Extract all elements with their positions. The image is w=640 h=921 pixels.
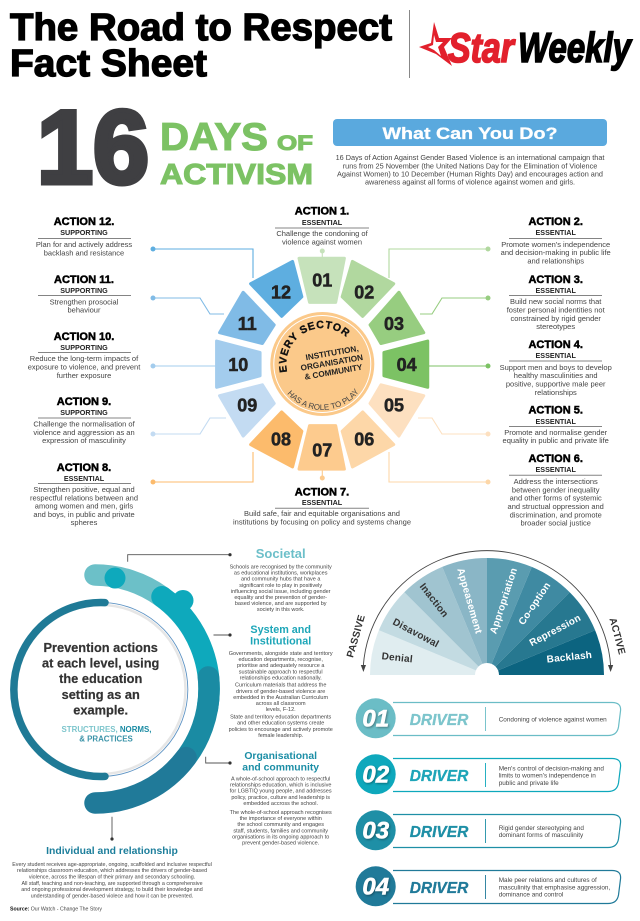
driver 02: public and private life [499,780,559,787]
chart: passive to active gauge: Backlash [546,650,593,666]
text block: system and institutional: sustainable approach to respectful [239,669,323,675]
action 12: SUPPORTING [60,228,108,237]
chart: passive to active gauge: Co-option [517,581,553,627]
wheel of twelve actions: 07 [312,441,332,461]
action 10: further exposure [57,371,111,380]
action 9 [33,396,136,445]
action 2: Promote women's independence [501,240,610,249]
action 4: relationships [535,388,577,397]
wheel of twelve actions: 05 [384,396,404,416]
wheel of twelve actions: 04 [397,355,417,375]
wheel centre: every sector [270,312,374,416]
action 4: ESSENTIAL [536,351,576,360]
text block: system and institutional: Institutional [250,635,311,647]
text block: system and institutional: policies to encourage and actively promote [229,727,333,733]
action 8: among women and men, girls [35,502,133,510]
intro paragraph: 16 Days of Action Against Gender Based Violence is an international campaign that [336,153,604,162]
action 5: Promote and normalise gender [504,428,608,437]
text block: system and institutional: female leadership. [258,733,304,739]
action 6: ESSENTIAL [536,465,576,474]
text block: organisational and community: policy, practice, culture and leadership is [231,795,330,801]
chart: passive to active gauge: ACTIVE [607,617,627,656]
text block: organisational and community: the importance of everyone within [240,816,322,822]
text block: societal: significant role to play in positively [239,583,322,589]
wheel centre: every sector: HAS A ROLE TO PLAY [288,388,358,410]
action 2: ESSENTIAL [536,228,576,237]
text block: system and institutional: prioritise and adequately resource a [237,663,325,669]
action 6: and structual oppression and [508,502,604,511]
text block: individual and relationship: and ongoing professional development strategy, to build their knowledge and [21,887,203,893]
logo: Star Weekly [419,22,633,71]
action 5: ACTION 5. [528,405,583,417]
text block: individual and relationship: understanding of gender-based violece and how it can be prevented. [31,893,193,899]
action 8: ESSENTIAL [64,474,105,483]
chart: passive to active gauge: Appeasement [454,567,484,636]
wheel centre: every sector: ORGANISATION [300,353,364,373]
text block: societal: Schools are recognised by the community [230,564,332,570]
action 10: exposure to violence, and prevent [28,362,141,372]
text block: system and institutional: education departments, recognise, [239,657,323,663]
wheel of twelve actions: 09 [237,396,257,416]
action 9: ACTION 9. [57,396,111,408]
wheel of twelve actions: 01 [312,271,332,291]
action 9: violence and aggression as an [33,428,135,437]
centre text: prevention actions: STRUCTURES, NORMS, [62,725,151,734]
centre text: prevention actions: at each level, using [42,656,159,670]
text block: individual and relationship: Individual and relationship [46,846,178,857]
action 10: Reduce the long-term impacts of [30,354,139,363]
action 11: behaviour [68,306,101,314]
action 3: Build new social norms that [510,297,602,306]
action 12: backlash and resistance [44,248,124,257]
title: The Road to Respect [10,7,392,49]
action 7: Build safe, fair and equitable organisations and [244,509,400,518]
heading: days of activism: ACTIVISM [160,159,313,191]
action 9: expression of masculinity [42,436,126,445]
text block: individual and relationship: Every student receives age-appropriate, ongoing, scaffolded and inclusive respectful [12,862,212,868]
wheel of twelve actions: 03 [384,314,404,334]
heading: days of activism: OF [277,132,313,155]
chart: passive to active gauge: Disavowal [391,617,441,650]
text block: societal: equality and the prevention of gender- [234,595,327,601]
heading: days of activism [160,116,313,191]
action 1: Challenge the condoning of [276,229,369,238]
text block: societal: influencing social issue, including gender [231,589,331,595]
chart: passive to active gauge [345,551,627,687]
action 1: violence against women [282,238,362,246]
driver 03: 03 [362,818,390,844]
text block: system and institutional: and other education systems create [237,721,324,727]
driver 04: DRIVER [410,880,469,897]
text block: system and institutional [229,624,333,739]
wheel centre: every sector: EVERY SECTOR [278,320,350,372]
driver 03: DRIVER [410,824,469,841]
action 7 [233,486,411,526]
text block: organisational and community: embedded accross the school. [243,801,318,807]
level connectors [110,553,232,841]
action 1: ESSENTIAL [302,218,343,227]
action 11: SUPPORTING [60,286,108,295]
wheel of twelve actions [217,258,428,469]
action 2: and decision-making in public life [501,248,611,257]
intro paragraph: Against Women) to 10 December (Human Rights Day) and encourages action and [337,170,603,178]
wheel of twelve actions: 11 [238,314,257,334]
text block: organisational and community: Organisational [244,751,317,762]
logo: Star Weekly: Star [448,24,516,71]
text block: individual and relationship: relationships classroom education, which addresses the drivers of gender-based [17,868,207,874]
driver 01 [356,698,621,738]
text block: societal: and community hubs that have a [241,577,321,583]
action 8: respectful relations between and [30,493,138,502]
text block: system and institutional: levels, F-12. [266,707,296,713]
heading: days of activism: DAYS [160,116,268,159]
action 8 [30,462,138,527]
intro paragraph: runs from 25 November (the United Nations Day for the Elimination of Violence [343,162,597,170]
action 7: institutions by focusing on policy and systems change [233,517,411,526]
text block: organisational and community: the school community and engages [237,822,324,828]
action 10: SUPPORTING [60,343,108,352]
centre text: prevention actions [42,640,159,744]
action 6: Address the intersections [514,477,598,486]
title: Fact Sheet [10,43,207,85]
chart: passive to active gauge: Inaction [417,582,450,620]
driver 04: masculinity that emphasise aggression, [499,884,610,891]
centre text: prevention actions: the education [59,671,142,686]
driver 04: Male peer relations and cultures of [499,877,597,884]
action 10 [28,331,141,380]
action 8: spheres [71,518,98,527]
action 8: and boys, in public and private [33,510,135,519]
wheel of twelve actions: 08 [271,430,291,450]
driver 02: DRIVER [410,768,469,785]
action 5 [503,405,609,445]
text block: system and institutional: embedded in the Australian Curriculum [233,695,329,701]
action 6 [508,453,604,528]
text block: system and institutional: Curriculum materials that address the [235,683,326,689]
text block: societal: as educational institutions, workplaces [234,571,328,577]
centre text: prevention actions: setting as an [62,687,140,702]
driver 02: Men's control of decision-making and [499,765,604,772]
action 11 [38,274,131,314]
driver 02 [356,754,621,794]
action 12: Plan for and actively address [36,240,132,249]
action 6: broader social justice [520,518,591,528]
banner: what can you do: What Can You Do? [382,124,558,143]
text block: societal: society in this work. [257,607,305,613]
driver 02: 02 [362,762,390,788]
wheel centre: every sector: INSTITUTION, [305,344,359,362]
driver 02: limits to women's independence in [499,773,596,780]
action 6: between gender inequality [512,486,600,494]
action 12 [36,216,132,257]
text block: organisational and community: and community [242,763,319,774]
text block: organisational and community: The whole-of-school approach recognises [230,810,332,816]
wheel centre: every sector: & COMMUNITY [304,363,364,382]
action 2 [501,216,611,266]
driver 04: dominance and control [499,892,563,899]
driver 04: 04 [362,874,389,900]
wheel of twelve actions: 06 [354,430,374,450]
chart: passive to active gauge: Repression [528,613,583,649]
centre text: prevention actions: & PRACTICES [79,735,133,744]
text block: organisational and community: for LGBTIQ young people, and addresses [230,789,332,795]
text block: societal [230,546,332,613]
action 8: ACTION 8. [57,462,111,474]
title [10,7,392,85]
action 7: ACTION 7. [295,486,349,498]
chart: passive to active gauge: Denial [381,651,413,665]
text block: individual and relationship [12,846,212,899]
action 9: Challenge the normalisation of [33,420,136,428]
text block: societal: Societal [256,546,306,561]
text block: organisational and community: A whole-of-school approach to respectful [231,776,330,782]
action 6: and other forms of systemic [510,494,602,503]
text block: organisational and community: relationships education, which is inclusive [230,783,331,789]
text block: organisational and community [230,751,332,846]
action 6: ACTION 6. [528,453,583,465]
action 4 [500,339,612,397]
action 3: stereotypes [536,322,575,331]
text block: individual and relationship: All staff, teaching and non-teaching, are supported through a comprehensive [21,881,203,887]
driver 03: Rigid gender stereotyping and [499,825,584,832]
text block: system and institutional: Governments, alongside state and territory [229,651,333,657]
source note: Source: Our Watch - Change The Story [10,906,102,912]
text block: system and institutional: across all classroom [256,701,306,707]
action 1 [275,206,369,246]
text block: societal: based violence, and are supported by [235,601,327,607]
action 8: Strengthen positive, equal and [33,485,135,494]
chart: prevention level arcs [14,568,209,803]
action 2: and relationships [527,256,584,266]
text block: system and institutional: relationships education nationally. [240,675,322,681]
action 12: ACTION 12. [54,216,114,228]
driver 03: dominant forms of masculinity [499,832,584,839]
wheel of twelve actions: 12 [271,282,291,302]
action 4: ACTION 4. [528,339,583,351]
banner: what can you do [333,119,607,146]
chart: passive to active gauge: Appropriation [488,567,520,635]
action 5: ESSENTIAL [536,417,576,426]
action 10: ACTION 10. [54,331,114,343]
action 11: Strengthen prosocial [50,298,119,306]
text block: individual and relationship: violence, across the lifespan of their primary and secondary schooling. [29,874,195,880]
action 3: ESSENTIAL [536,286,576,295]
text block: organisational and community: prevent gender-based violence. [242,840,320,846]
action 3: foster personal indentities not [507,306,606,314]
action 3: constrained by rigid gender [510,314,601,323]
action 11: ACTION 11. [54,274,114,286]
text block: system and institutional: State and territory education departments [230,715,332,721]
centre text: prevention actions: Prevention actions [43,640,158,655]
action 7: ESSENTIAL [302,498,343,507]
driver 01: DRIVER [410,712,469,729]
driver 04 [356,866,621,906]
action 1: ACTION 1. [295,206,349,218]
connector lines [150,246,490,484]
driver 03 [356,810,621,850]
text block: system and institutional: System and [250,624,311,636]
text block: organisational and community: staff, students, families and community [233,828,328,834]
action 3: ACTION 3. [528,274,583,286]
action 4: healthy masculinities and [514,371,598,380]
action 9: SUPPORTING [60,408,108,417]
intro paragraph: awareness against all forms of violence against women and girls. [365,178,575,186]
action 6: discrimination, and promote [510,510,602,519]
action 4: positive, supportive male peer [506,380,606,388]
wheel of twelve actions: 10 [228,355,248,375]
wheel of twelve actions: 02 [354,282,374,302]
action 5: equality in public and private life [503,436,609,445]
driver 01: 01 [362,706,389,732]
text block: organisational and community: organisations in its ongoing approach to [232,834,329,840]
action 3 [507,274,606,331]
chart: passive to active gauge: PASSIVE [345,614,368,659]
text block: system and institutional: drivers of gender-based violence are [236,689,325,695]
heading: 16: 16 [37,90,149,206]
centre text: prevention actions: example. [73,702,128,718]
driver 01: Condoning of violence against women [499,717,607,724]
action 2: ACTION 2. [528,216,583,228]
action 4: Support men and boys to develop [500,363,612,372]
